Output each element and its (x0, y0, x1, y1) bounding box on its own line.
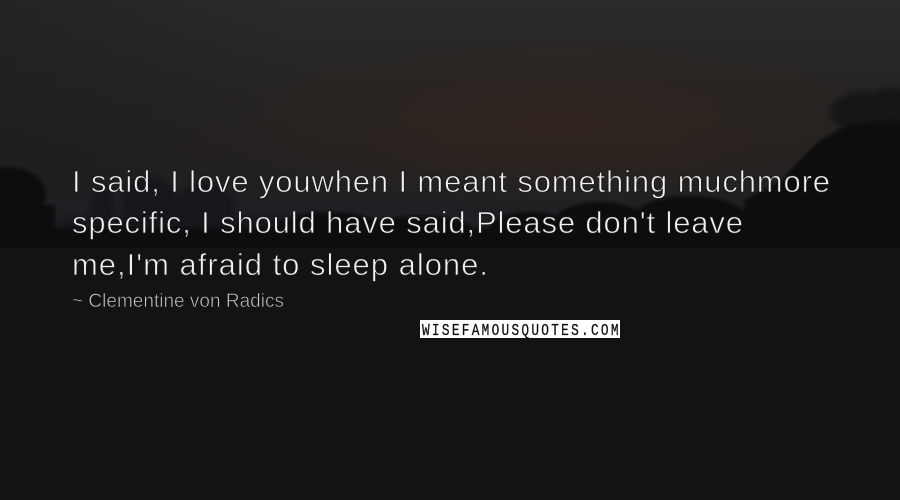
background: dark field (0, 248, 900, 500)
background: sparse mid trees (60, 177, 290, 250)
background: treeline silhouette (0, 120, 900, 255)
author attribution: ~ Clementine von Radics (72, 291, 284, 312)
quote text (72, 164, 830, 282)
background: left sky shading (0, 0, 300, 200)
watermark badge: WISEFAMOUSQUOTES.COM (422, 320, 619, 341)
background: leafy tree crown (830, 88, 900, 132)
background: dusk sky (0, 0, 900, 260)
quote line 3: me,I'm afraid to sleep alone. (72, 247, 488, 282)
quote line 1: I said, I love youwhen I meant something muchmore (72, 164, 830, 199)
quote line 2: specific, I should have said,Please don't leave (72, 205, 743, 240)
background: sunset glow (240, 35, 880, 215)
